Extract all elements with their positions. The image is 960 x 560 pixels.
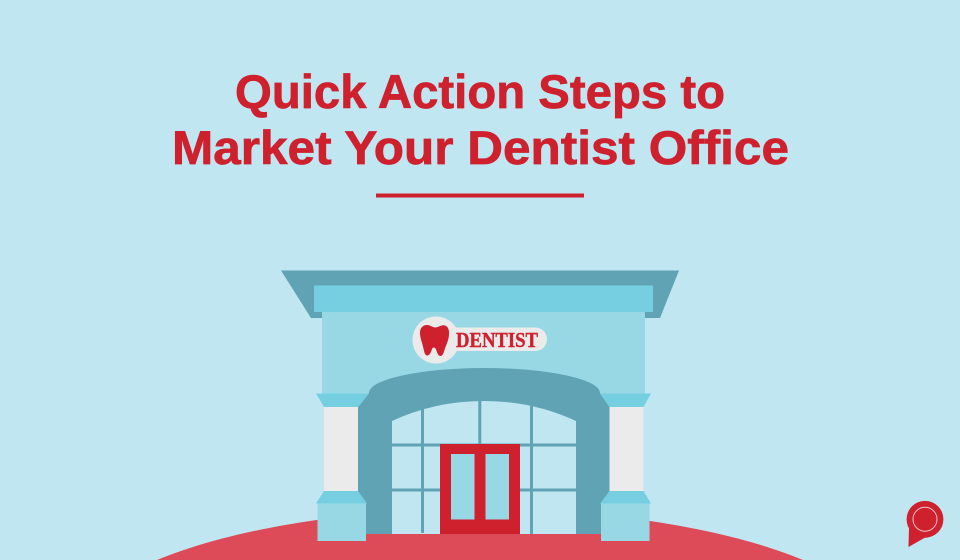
right column [600,394,651,541]
dentist sign [412,316,547,364]
building [281,270,679,541]
glass window [392,401,576,534]
sign text: DENTIST [456,328,538,352]
icon: tooth [420,325,449,356]
entrance arch [358,368,610,534]
left column [316,394,369,541]
icon: brand speech bubble logo [907,501,943,547]
title: Market Your Dentist Office [172,121,789,174]
title [172,65,789,174]
roof fascia [314,286,653,312]
window mullions [392,401,576,534]
title: Quick Action Steps to [235,65,725,118]
title underline [376,194,584,198]
roof [281,270,679,318]
red door [440,444,520,534]
upper wall [322,312,645,402]
ground [157,509,803,560]
